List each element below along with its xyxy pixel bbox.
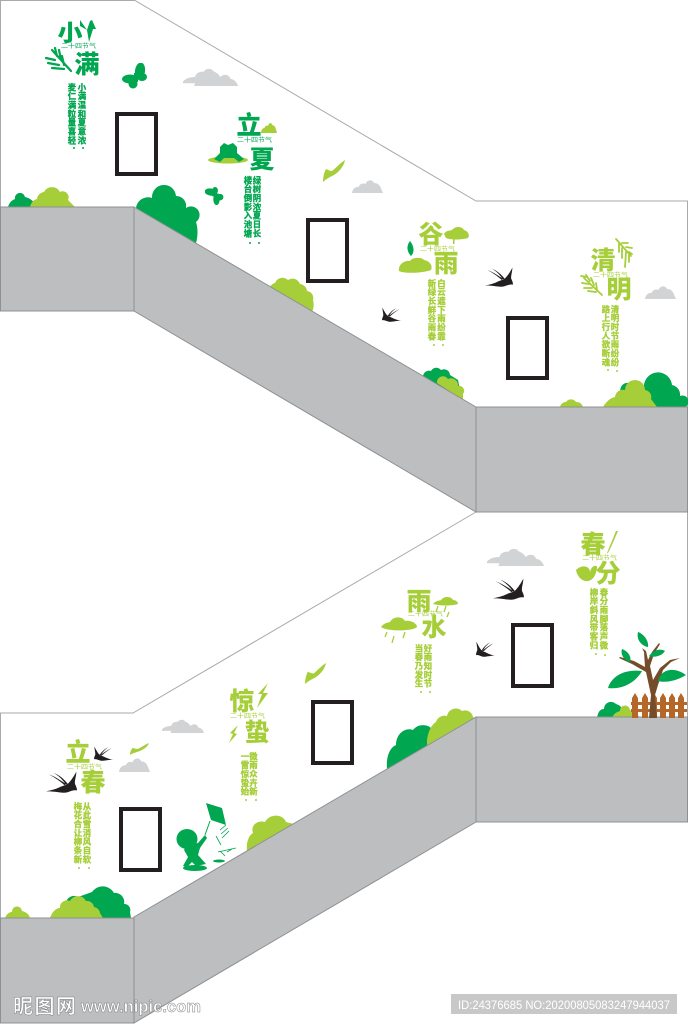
subtitle: 二十四节气 — [237, 136, 272, 144]
poem — [414, 643, 433, 693]
icon: small cloud — [261, 123, 277, 133]
poem: 楼台倒影入池塘 — [243, 175, 253, 238]
icon: tree — [608, 632, 686, 718]
subtitle: 二十四节气 — [61, 42, 96, 50]
heading: 小 — [58, 21, 83, 47]
watermark: id label — [451, 994, 677, 1014]
section: lixia — [208, 111, 277, 244]
poem — [243, 175, 262, 244]
icon: wheat sprout — [80, 20, 96, 42]
heading: 满 — [74, 51, 100, 79]
poem: 白云遮下雨纷霏 — [436, 278, 446, 341]
poem: 新绿长鲜谷雨春 — [427, 278, 437, 341]
watermark: nipic: 昵图网 — [13, 996, 78, 1018]
fence — [631, 693, 687, 718]
stair: landing lower right — [476, 717, 688, 822]
bush: jingzhe stair — [247, 816, 294, 851]
green birds — [130, 160, 345, 755]
icon: grass blades — [607, 531, 618, 553]
bushes: rain water stair — [387, 709, 475, 769]
icon: frog on leaf — [208, 143, 248, 164]
poem — [240, 751, 258, 801]
heading: 立 — [236, 111, 262, 140]
poem — [427, 278, 446, 346]
icon: leaf branch — [581, 275, 602, 295]
subtitle: 二十四节气 — [408, 610, 443, 618]
heading: 春 — [80, 769, 106, 797]
bushes: top-left landing — [8, 187, 75, 207]
bushes: lower-left landing — [5, 886, 131, 918]
poem: 小满温和夏意浓 — [77, 82, 87, 145]
icon: leaves — [576, 566, 597, 581]
bush: stair dark green top — [134, 185, 200, 243]
subtitle: 二十四节气 — [593, 271, 628, 279]
swallows — [46, 268, 524, 793]
icon: child flying kite — [176, 803, 236, 871]
heading: 春 — [580, 531, 606, 559]
section: lichun — [65, 738, 106, 869]
stair: lower flight — [134, 717, 476, 1023]
subtitle: 二十四节气 — [420, 245, 455, 253]
icon: sprout on mound — [399, 241, 432, 273]
icon: lightning — [229, 683, 268, 743]
picture frames — [117, 114, 552, 870]
icon: cloud tree — [444, 227, 469, 244]
poem — [67, 82, 87, 149]
stair: landing lower left — [0, 918, 134, 1023]
stair: upper flight — [134, 207, 476, 512]
butterflies — [122, 62, 223, 205]
icon: leaf branch — [616, 239, 632, 267]
heading: 水 — [421, 614, 447, 642]
poem — [73, 801, 92, 869]
bushes: stair lower of upper flight — [423, 368, 464, 400]
icon: large rain cloud — [381, 617, 417, 643]
watermark: nipic: www.nipic.com — [80, 997, 201, 1016]
poem — [601, 304, 620, 372]
heading: 谷 — [418, 221, 444, 249]
bushes: spring landing — [597, 702, 640, 718]
subtitle: 二十四节气 — [67, 763, 102, 771]
stair: landing upper right — [476, 407, 688, 512]
section: yushui — [381, 588, 458, 693]
watermark: nipic — [13, 996, 201, 1018]
heading: 立 — [65, 738, 91, 767]
heading: 雨 — [433, 250, 459, 278]
poem: 好雨知时节 — [423, 643, 433, 689]
poem: 绿树阴浓夏日长 — [252, 175, 262, 238]
poem — [589, 587, 609, 656]
poem: 清明时节雨纷纷 — [610, 304, 620, 367]
heading: 蛰 — [244, 719, 270, 747]
subtitle: 二十四节气 — [230, 712, 265, 720]
poem: 春分雨脚落声微 — [599, 587, 609, 650]
icon: wheat ear — [46, 48, 71, 71]
clouds — [119, 69, 676, 772]
section: guyu — [399, 221, 469, 346]
poem: 从此雪消风自软 — [82, 802, 92, 864]
poem: 路上行人欲断魂 — [601, 304, 611, 367]
icon: small rain cloud — [433, 597, 458, 617]
poem: 麦仁满粒量喜轻 — [67, 82, 77, 145]
poem: 梅花合让柳条新 — [73, 801, 83, 864]
section: jingzhe — [229, 683, 270, 801]
poem: 柳岸斜风带客归 — [589, 587, 599, 650]
heading: 惊 — [229, 688, 255, 716]
section: xiaoman — [46, 20, 100, 149]
bush: stair light green middle — [268, 278, 314, 312]
heading: 雨 — [406, 588, 432, 616]
bushes: upper right landing — [560, 372, 688, 407]
subtitle: 二十四节气 — [582, 554, 617, 562]
heading: 明 — [606, 276, 632, 304]
heading: 清 — [590, 247, 616, 275]
stair: landing upper left — [0, 207, 134, 311]
poem: 一雷惊蛰始 — [240, 752, 250, 797]
section: qingming — [581, 239, 632, 372]
watermark: id label: ID:24376685 NO:20200805083247944037 — [458, 1000, 670, 1012]
section: chunfen — [576, 531, 621, 656]
heading: 分 — [595, 560, 621, 588]
poem: 微雨众卉新 — [248, 751, 258, 797]
poem: 当春乃发生 — [414, 643, 424, 688]
heading: 夏 — [249, 146, 275, 174]
